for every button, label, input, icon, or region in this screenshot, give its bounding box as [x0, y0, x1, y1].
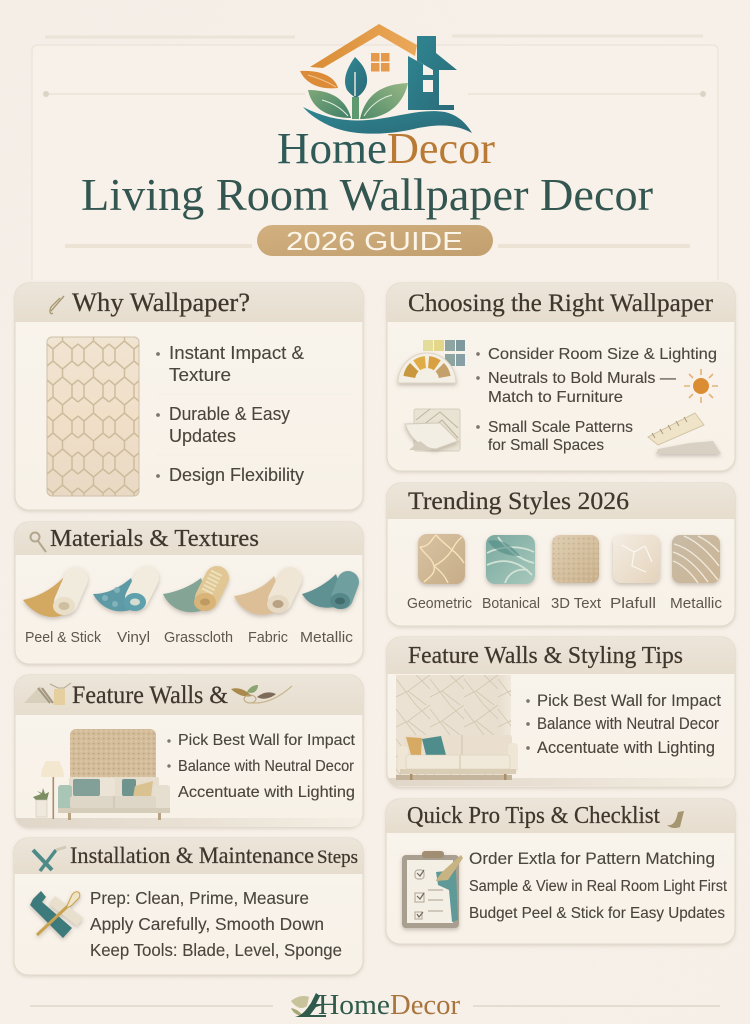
icon: teal house — [408, 36, 457, 110]
bullet list — [167, 732, 356, 801]
guide badge — [257, 225, 493, 256]
choosing list: Neutrals to Bold Murals — — [488, 370, 676, 387]
sofa — [398, 735, 518, 780]
icon: fan deck — [398, 353, 456, 383]
header frame — [32, 36, 718, 280]
swatch labels: 3D Text — [551, 596, 601, 612]
footer wordmark: Home — [318, 989, 390, 1021]
guide badge: 2026 GUIDE — [286, 226, 463, 256]
checklist text: Budget Peel & Stick for Easy Updates — [469, 905, 725, 922]
icon: paint tools — [24, 683, 71, 705]
heading: Materials & Textures — [50, 525, 259, 552]
icon: magnifier — [30, 532, 46, 552]
benefits list — [156, 343, 350, 485]
icon: wave swoosh — [303, 107, 472, 134]
icon: left green leaf — [308, 90, 351, 118]
steps text: Apply Carefully, Smooth Down — [90, 914, 324, 934]
heading: Choosing the Right Wallpaper — [408, 288, 713, 317]
swatch labels: Metallic — [670, 596, 722, 612]
heading: Feature Walls & — [72, 682, 228, 709]
title: Living Room Wallpaper Decor — [81, 170, 653, 220]
patterned wall — [396, 675, 511, 779]
icon: house windows — [409, 56, 433, 92]
roll: fabric — [234, 576, 290, 615]
icon: leaf sprig — [231, 685, 292, 703]
floor — [16, 815, 362, 827]
swatch labels: Plafull — [610, 596, 656, 612]
heading: Quick Pro Tips & Checklist — [407, 803, 660, 829]
panel: materials and textures — [15, 522, 363, 664]
plant — [33, 788, 49, 817]
swatch labels: Botanical — [482, 596, 540, 612]
tips list: Accentuate with Lighting — [537, 739, 715, 757]
bullet list: Accentuate with Lighting — [178, 784, 355, 801]
roll labels: Grasscloth — [164, 630, 233, 646]
heading: Steps — [317, 847, 358, 868]
roll: grasscloth — [163, 572, 217, 612]
benefits list: Instant Impact & — [169, 343, 304, 363]
tips list: Balance with Neutral Decor — [537, 715, 719, 733]
icon: orange roof — [310, 24, 417, 68]
swatch: metallic — [672, 535, 720, 583]
patterned wall — [70, 729, 156, 789]
choosing list: Small Scale Patterns — [488, 419, 633, 436]
steps text — [90, 888, 342, 960]
icon: paper clip — [50, 296, 64, 314]
icon: small tools — [33, 847, 66, 871]
benefits list: Updates — [169, 426, 236, 446]
heading: Installation & Maintenance — [70, 843, 314, 868]
panel: feature walls and styling tips — [387, 637, 735, 787]
floor — [388, 774, 734, 786]
panel: trending styles — [387, 483, 735, 626]
roll: metallic — [302, 574, 350, 609]
logo wordmark: Decor — [387, 124, 495, 173]
checklist text: Order Extla for Pattern Matching — [469, 849, 715, 868]
illustration: sofa against wall — [388, 675, 734, 786]
steps text: Prep: Clean, Prime, Measure — [90, 888, 309, 908]
tips list — [526, 692, 721, 757]
logo: house and leaves — [300, 24, 472, 134]
icon: teal leaf — [345, 57, 367, 98]
icon: sun — [684, 369, 718, 403]
swatch: 3D text — [552, 535, 599, 583]
benefits list: Texture — [169, 365, 231, 385]
sofa — [58, 777, 170, 820]
panel: choosing the right wallpaper — [387, 283, 735, 471]
swatch labels: Geometric — [407, 596, 472, 612]
logo wordmark — [277, 124, 495, 173]
choosing list: for Small Spaces — [488, 437, 604, 454]
bullet list: Balance with Neutral Decor — [178, 758, 355, 775]
panel: why wallpaper — [15, 283, 363, 510]
lamp — [41, 761, 64, 819]
icon: clipboard — [402, 851, 463, 928]
icon: chevron wallpaper sample — [405, 409, 460, 451]
heading: Why Wallpaper? — [72, 288, 250, 317]
roll labels: Metallic — [300, 630, 353, 646]
icon: orange leaf — [300, 71, 338, 88]
icon: roof window — [371, 53, 390, 72]
icon: footer logo — [291, 993, 326, 1017]
panel: quick pro tips and checklist — [386, 799, 735, 944]
roll: vinyl — [93, 578, 147, 611]
checklist text — [469, 849, 728, 922]
icon: gold check — [667, 811, 684, 828]
choosing list: Consider Room Size & Lighting — [488, 346, 717, 363]
icon: colour swatches — [423, 340, 465, 366]
footer wordmark — [318, 989, 460, 1021]
roll labels — [25, 630, 353, 646]
choosing list — [476, 346, 717, 454]
swatch: geometric — [418, 534, 465, 584]
footer wordmark: Decor — [390, 989, 460, 1021]
heading: Trending Styles 2026 — [408, 486, 629, 515]
footer — [30, 989, 720, 1021]
wallpaper sample — [47, 337, 139, 496]
icon: crossed tools — [30, 891, 80, 938]
icon: right green leaf — [360, 83, 408, 119]
illustration: living room with sofa — [16, 729, 362, 827]
steps text: Keep Tools: Blade, Level, Sponge — [90, 940, 342, 960]
swatch: botanical — [486, 535, 535, 584]
roll: peel and stick — [23, 578, 76, 617]
swatch labels — [407, 596, 722, 612]
bullet list: Pick Best Wall for Impact — [178, 732, 356, 749]
panel: installation and maintenance — [14, 838, 363, 975]
roll labels: Fabric — [248, 630, 288, 646]
tips list: Pick Best Wall for Impact — [537, 692, 721, 710]
panel: feature walls left — [15, 675, 363, 827]
benefits list: Design Flexibility — [169, 465, 304, 485]
logo wordmark: Home — [277, 124, 387, 173]
checklist text: Sample & View in Real Room Light First — [469, 878, 728, 895]
icon: stem — [352, 97, 359, 119]
icon: ruler — [648, 413, 721, 454]
roll labels: Vinyl — [117, 630, 150, 646]
benefits list: Durable & Easy — [169, 404, 290, 424]
heading: Feature Walls & Styling Tips — [408, 642, 683, 669]
roll labels: Peel & Stick — [25, 630, 102, 646]
choosing list: Match to Furniture — [488, 389, 623, 406]
swatch: playful — [613, 535, 660, 583]
